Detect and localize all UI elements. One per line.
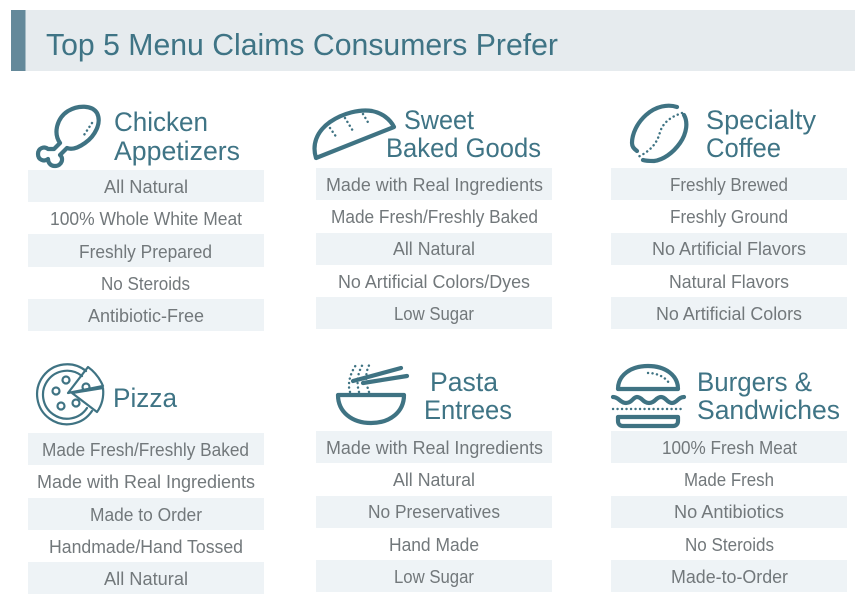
list: pasta claims: All Natural	[393, 470, 475, 490]
list: burger claims: Made Fresh	[684, 470, 774, 490]
list: burger claims: No Antibiotics	[674, 502, 784, 522]
list: chicken claims: No Steroids	[101, 274, 190, 294]
list: pizza claims: Made to Order	[90, 505, 202, 525]
heading: burgers and sandwiches: Sandwiches	[697, 395, 840, 425]
list: chicken claims	[28, 170, 264, 331]
list: pizza claims: Handmade/Hand Tossed	[49, 537, 243, 557]
panel: burgers and sandwiches	[611, 366, 847, 592]
list: pasta claims: Low Sugar	[394, 567, 474, 587]
icon: pizza	[37, 364, 103, 424]
list: pasta claims: Made with Real Ingredients	[326, 438, 543, 458]
heading: chicken appetizers: Appetizers	[114, 136, 240, 166]
list: baked goods claims: All Natural	[393, 239, 475, 259]
list: chicken claims: Antibiotic-Free	[88, 306, 204, 326]
heading: burgers and sandwiches: Burgers &	[697, 367, 812, 397]
list: chicken claims: All Natural	[104, 177, 188, 197]
icon: coffee bean	[632, 106, 686, 161]
list: pasta claims: Hand Made	[389, 535, 479, 555]
list: burger claims: No Steroids	[685, 535, 774, 555]
list: coffee claims: Natural Flavors	[669, 272, 789, 292]
list: baked goods claims: Made with Real Ingredients	[326, 175, 543, 195]
list: coffee claims: Freshly Ground	[670, 207, 788, 227]
list: pasta claims	[316, 431, 552, 592]
heading: sweet baked goods: Baked Goods	[386, 133, 541, 163]
list: pasta claims: No Preservatives	[368, 502, 500, 522]
list: burger claims	[611, 431, 847, 592]
list: pizza claims: Made with Real Ingredients	[37, 472, 255, 492]
heading: chicken appetizers: Chicken	[114, 107, 208, 137]
list: coffee claims: No Artificial Colors	[656, 304, 802, 324]
panel: sweet baked goods	[315, 105, 552, 329]
list: coffee claims: No Artificial Flavors	[652, 239, 806, 259]
title banner: Top 5 Menu Claims Consumers Prefer	[46, 27, 558, 62]
title banner	[11, 10, 855, 71]
panel: pizza	[28, 364, 264, 594]
icon: chicken drumstick	[38, 107, 99, 166]
list: coffee claims: Freshly Brewed	[670, 175, 788, 195]
heading: pasta entrees: Entrees	[424, 395, 512, 425]
heading: pizza: Pizza	[113, 383, 178, 413]
list: chicken claims: Freshly Prepared	[79, 242, 212, 262]
list: pizza claims: All Natural	[104, 569, 188, 589]
heading: specialty coffee: Coffee	[706, 133, 781, 163]
heading: pasta entrees: Pasta	[430, 367, 499, 397]
heading: sweet baked goods: Sweet	[404, 105, 474, 135]
icon: sweet bread	[315, 110, 394, 158]
icon: noodle bowl with chopsticks	[338, 362, 407, 423]
heading: specialty coffee: Specialty	[706, 105, 816, 135]
panel: specialty coffee	[611, 105, 847, 329]
list: baked goods claims	[316, 168, 552, 329]
list: coffee claims	[611, 168, 847, 329]
panel: chicken appetizers	[28, 107, 264, 331]
list: pizza claims: Made Fresh/Freshly Baked	[42, 440, 249, 460]
list: baked goods claims: No Artificial Colors/Dyes	[338, 272, 530, 292]
list: chicken claims: 100% Whole White Meat	[50, 209, 242, 229]
panel: pasta entrees	[316, 362, 552, 592]
list: baked goods claims: Made Fresh/Freshly Baked	[331, 207, 538, 227]
icon: burger	[613, 366, 684, 426]
list: burger claims: 100% Fresh Meat	[662, 438, 797, 458]
list: pizza claims	[28, 433, 264, 594]
list: burger claims: Made-to-Order	[671, 567, 788, 587]
list: baked goods claims: Low Sugar	[394, 304, 474, 324]
